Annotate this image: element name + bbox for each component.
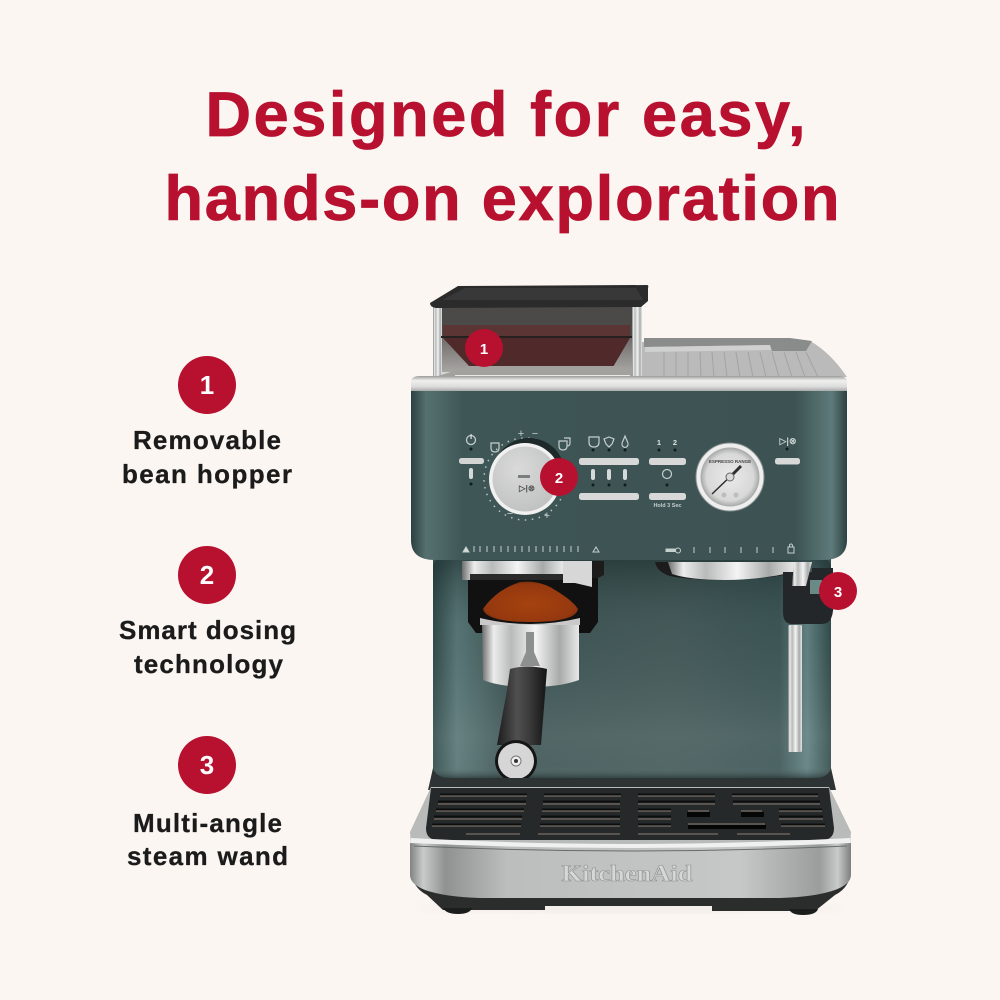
feature 3: multi-angle steam wand: Multi-angle: [133, 808, 282, 838]
marker 3: 3: [834, 584, 842, 601]
shot buttons: 2: [673, 438, 677, 447]
title: Designed for easy,: [206, 80, 806, 150]
top plate: [640, 338, 847, 378]
coffee grounds: [483, 582, 578, 622]
hopper body: [433, 306, 642, 378]
portafilter: [480, 618, 580, 745]
feature 3: multi-angle steam wand: 3: [200, 750, 214, 780]
brand emboss: KitchenAid: [562, 861, 693, 886]
beans: [443, 325, 630, 337]
steam lock scale: [666, 544, 794, 553]
feature 2: smart dosing technology: technology: [134, 649, 284, 679]
stainless base: [410, 838, 851, 898]
portafilter knob: [495, 740, 537, 782]
start button: [775, 436, 800, 464]
dose dial: −: [507, 508, 513, 520]
marker 2: 2: [555, 470, 563, 487]
upper control panel: [411, 376, 847, 560]
feature 2: smart dosing technology: [119, 546, 296, 679]
feature 3: multi-angle steam wand: [127, 736, 288, 871]
ground shadow: [415, 904, 845, 912]
feature 1: removable bean hopper: bean hopper: [122, 459, 292, 489]
steam wand: [783, 562, 833, 752]
stainless side rails: [410, 787, 851, 845]
marker 2: [540, 458, 578, 496]
drink and temperature buttons: [579, 436, 639, 500]
marker 1: [465, 329, 503, 367]
title: [164, 80, 840, 234]
pressure gauge: ESPRESSO RANGE: [709, 459, 751, 464]
lower body: [433, 545, 831, 780]
power button and temperature icon: [459, 434, 484, 486]
dose dial: [484, 428, 570, 522]
feet: [411, 872, 851, 915]
feature 1: removable bean hopper: Removable: [133, 425, 281, 455]
feature 2: smart dosing technology: Smart dosing: [119, 615, 296, 645]
dose dial: −: [532, 428, 538, 440]
base dark section: [428, 768, 836, 790]
hopper lid: [430, 285, 648, 308]
shot buttons: 1: [657, 438, 661, 447]
feature 1: removable bean hopper: [122, 356, 292, 489]
feature 2: smart dosing technology: 2: [200, 560, 214, 590]
bean hopper: [430, 285, 648, 378]
marker 1: 1: [480, 341, 488, 358]
title: hands-on exploration: [164, 164, 840, 234]
controls: [459, 428, 800, 553]
shot buttons: [649, 438, 686, 509]
drip tray: [426, 788, 834, 840]
shot buttons: Hold 3 Sec: [653, 503, 682, 509]
marker 3: [819, 572, 857, 610]
feature 1: removable bean hopper: 1: [200, 370, 214, 400]
grate slots: [432, 794, 825, 824]
group head: [462, 561, 604, 633]
feature list: [119, 356, 296, 871]
espresso machine: [410, 285, 857, 915]
dose dial: +: [518, 428, 524, 440]
start button: ▷|⊗: [779, 436, 796, 446]
dose dial: ▷|⊗: [518, 483, 535, 493]
brew head: [655, 562, 795, 580]
grind scale: [463, 546, 599, 552]
pressure gauge: [696, 443, 764, 511]
feature 3: multi-angle steam wand: steam wand: [127, 841, 288, 871]
dose dial: +: [544, 510, 550, 522]
